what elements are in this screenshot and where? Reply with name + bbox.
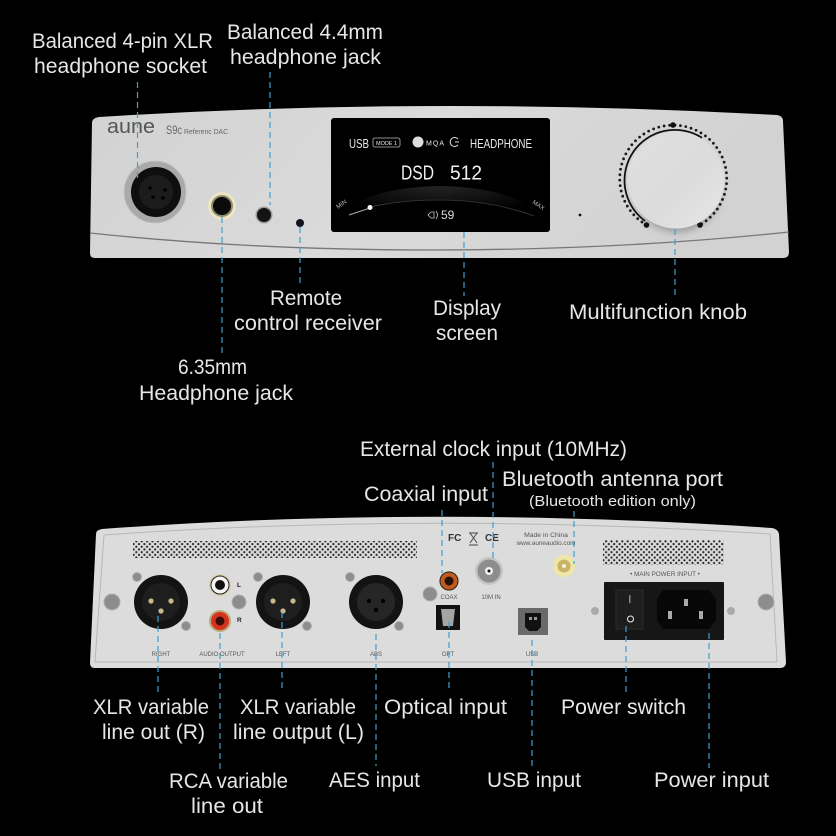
- label: RCA line out: [169, 770, 288, 818]
- label: coaxial input: Coaxial input: [364, 483, 488, 506]
- rear silkscreen labels: OPT: [442, 652, 454, 658]
- status row: [349, 136, 532, 151]
- label: display screen: Display: [433, 297, 501, 320]
- icon: 6.35mm jack: [208, 192, 236, 220]
- label: balanced 4.4mm jack: [227, 21, 383, 69]
- model name: Referenc DAC: [184, 127, 229, 136]
- label: USB input: USB input: [487, 769, 581, 792]
- label: XLR line out L: line output (L): [233, 721, 364, 744]
- panel: rear of DAC: [90, 517, 786, 668]
- brand logo: aune: [107, 116, 155, 138]
- rear silkscreen labels: 10M IN: [481, 595, 501, 601]
- label: power input: Power input: [654, 769, 769, 792]
- label: 6.35mm headphone jack: Headphone jack: [139, 382, 294, 405]
- certification marks: [448, 533, 499, 545]
- knob seat arc: [624, 130, 702, 221]
- label: remote control receiver: Remote: [270, 287, 342, 310]
- label: bluetooth antenna: (Bluetooth edition only): [529, 493, 696, 510]
- leader lines: [138, 72, 709, 770]
- label: bluetooth antenna: Bluetooth antenna port: [502, 468, 723, 491]
- rear silkscreen labels: USB: [526, 652, 538, 658]
- certification marks: CE: [485, 533, 499, 544]
- BNC clock input: [475, 557, 503, 585]
- label: remote control receiver: control receiver: [234, 312, 382, 335]
- knob dot ring: [620, 125, 727, 225]
- XLR line out left: [256, 575, 310, 629]
- volume slider: MIN: [336, 199, 348, 211]
- rear silkscreen labels: AUDIO OUTPUT: [199, 652, 245, 658]
- label: XLR line out R: [93, 696, 209, 744]
- format readout: [401, 162, 482, 184]
- knob cap: [628, 132, 724, 228]
- volume slider: MAX: [531, 200, 545, 212]
- rear silkscreen labels: COAX: [440, 595, 458, 601]
- format readout: 512: [450, 162, 482, 184]
- icon: 4.4mm jack: [256, 206, 272, 224]
- coax input: [439, 571, 459, 591]
- icon: XLR headphone socket: [124, 161, 186, 223]
- format readout: DSD: [401, 162, 434, 184]
- right vent: [603, 540, 724, 565]
- label: balanced XLR socket: Balanced 4-pin XLR: [32, 30, 213, 53]
- XLR AES input: [349, 575, 403, 629]
- rear silkscreen labels: Made in China: [524, 532, 568, 539]
- rear silkscreen labels: ABS: [370, 652, 382, 658]
- rear silkscreen labels: www.auneaudio.com: [516, 540, 575, 547]
- label: bluetooth antenna: [502, 468, 723, 510]
- label: balanced XLR socket: headphone socket: [34, 55, 207, 78]
- model name: [166, 123, 229, 137]
- label: balanced XLR socket: [32, 30, 213, 78]
- rear chassis: [90, 517, 786, 668]
- display glow arc: [336, 186, 546, 232]
- label: display screen: [433, 297, 501, 345]
- power module: [604, 582, 724, 640]
- label: external clock: External clock input (10MHz): [360, 438, 627, 461]
- certification marks: FC: [448, 533, 461, 544]
- label: balanced 4.4mm jack: Balanced 4.4mm: [227, 21, 383, 44]
- label: XLR line out L: XLR variable: [240, 696, 356, 719]
- display screen: [331, 118, 550, 232]
- left vent: [133, 541, 417, 558]
- label: display screen: screen: [436, 322, 498, 345]
- label: optical input: Optical input: [384, 696, 507, 719]
- label: balanced 4.4mm jack: headphone jack: [230, 46, 382, 69]
- RCA channel letters: L: [237, 582, 241, 589]
- status row: MODE 1: [376, 141, 397, 147]
- RCA right: [209, 610, 231, 632]
- rear silkscreen labels: • MAIN POWER INPUT •: [630, 571, 700, 578]
- power switch: [616, 590, 643, 629]
- SMA antenna port: [553, 555, 575, 577]
- status row: HEADPHONE: [470, 136, 532, 151]
- label: 6.35mm headphone jack: 6.35mm: [178, 356, 247, 379]
- RCA left: [209, 574, 231, 596]
- IEC power inlet: [657, 590, 716, 629]
- volume readout: [428, 208, 455, 222]
- label: multifunction knob: Multifunction knob: [569, 301, 747, 324]
- small indicator dot: [579, 214, 581, 216]
- label: XLR line out R: XLR variable: [93, 696, 209, 719]
- label: power switch: Power switch: [561, 696, 686, 719]
- RCA channel letters: R: [237, 617, 242, 624]
- multifunction knob: [620, 122, 727, 232]
- volume slider: [336, 199, 545, 215]
- screws: [104, 572, 774, 630]
- knob shadow: [633, 144, 721, 232]
- label: RCA line out: line out: [191, 795, 263, 818]
- front chassis: [90, 106, 789, 258]
- rear silkscreen labels: [152, 532, 700, 658]
- status row: MQA: [426, 140, 444, 148]
- volume readout: 59: [441, 208, 455, 222]
- optical input: [436, 605, 460, 630]
- rear silkscreen labels: LEFT: [276, 652, 291, 658]
- label: remote control receiver: [234, 287, 382, 335]
- label: XLR line out L: [233, 696, 364, 744]
- label: 6.35mm headphone jack: [139, 356, 294, 405]
- label: RCA line out: RCA variable: [169, 770, 288, 793]
- XLR line out right: [134, 575, 188, 629]
- icon: remote receiver: [296, 219, 304, 227]
- label: AES input: AES input: [329, 769, 420, 792]
- front lower groove: [90, 232, 789, 250]
- label: XLR line out R: line out (R): [102, 721, 205, 744]
- rear silkscreen labels: RIGHT: [152, 652, 171, 658]
- panel: front of DAC: [90, 106, 789, 258]
- model name: S9c: [166, 123, 182, 137]
- RCA channel letters: [237, 582, 242, 624]
- status row: USB: [349, 136, 369, 151]
- USB input: [518, 608, 548, 635]
